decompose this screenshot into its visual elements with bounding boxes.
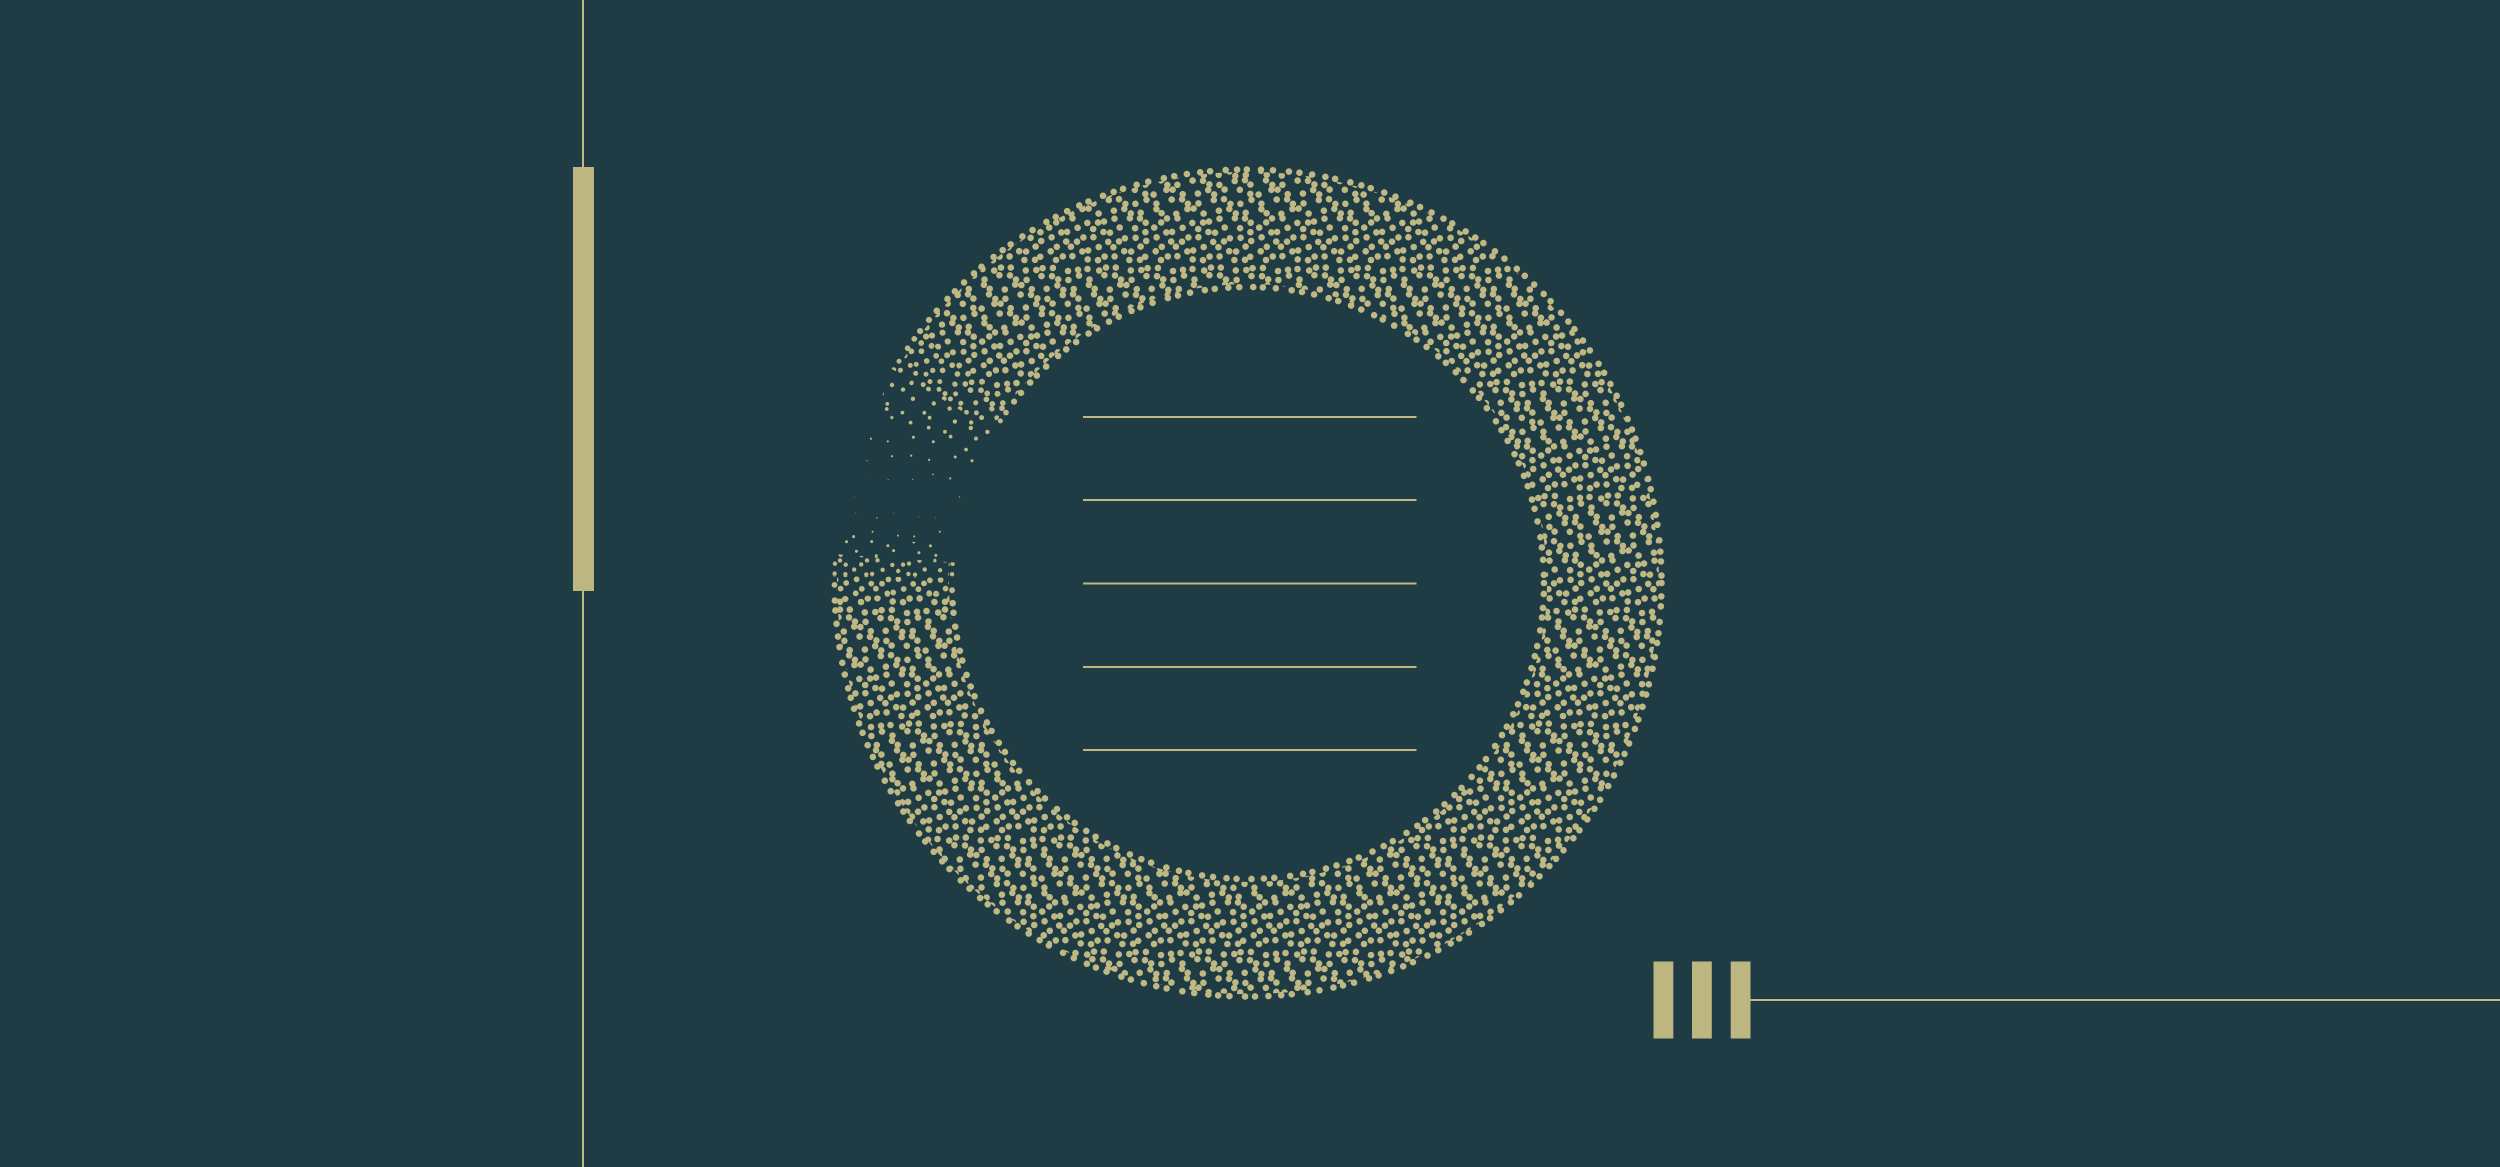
five horizontal rules inside the ring [1083,416,1416,751]
fading dots above the gap [833,316,1024,597]
horizontal rule, lower right [1750,999,2500,1001]
infographic canvas [573,0,2500,1167]
dotted ring with fading gap [832,166,1665,1000]
fading dots below the gap [832,496,955,598]
vertical rule, left [582,0,584,1167]
three vertical bars, lower right [1654,962,1750,1038]
vertical accent bar, left [573,167,594,591]
main ring of full-size dots [832,166,1665,1000]
